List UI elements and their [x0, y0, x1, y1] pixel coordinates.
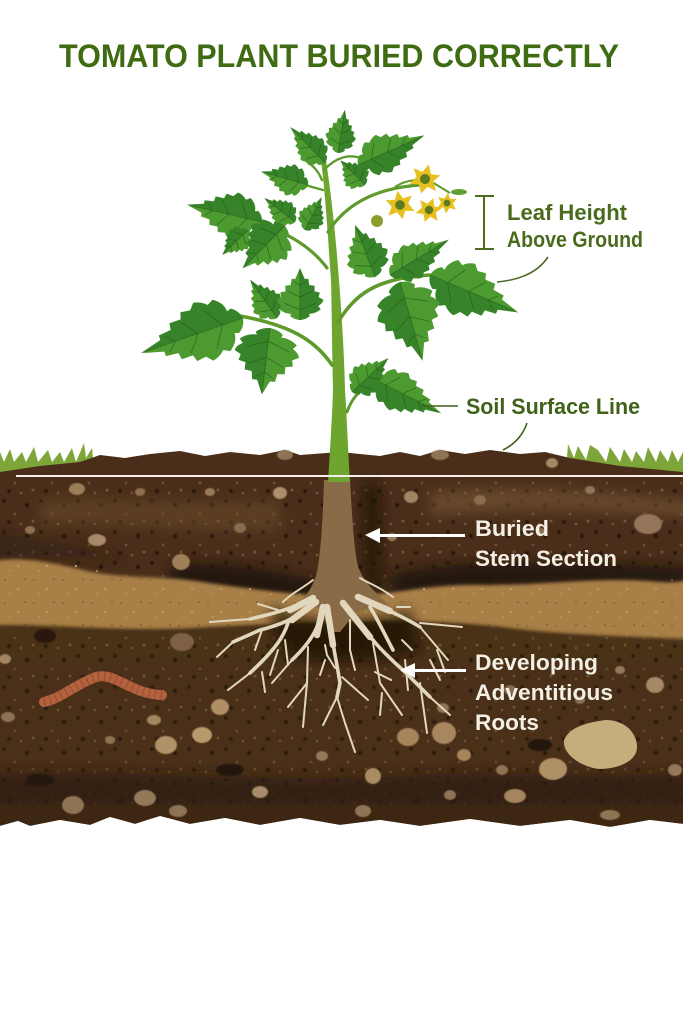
connector — [503, 423, 527, 450]
torn lower edge — [0, 806, 683, 827]
roots — [210, 578, 462, 752]
grass: right — [566, 444, 683, 472]
deep dark layer — [0, 621, 683, 700]
arrow — [400, 663, 466, 678]
label: developing adventitious roots: Developing — [475, 650, 598, 675]
label: developing adventitious roots: Roots — [475, 710, 539, 735]
worm — [44, 676, 162, 702]
tomato plant leaves — [131, 107, 529, 432]
dark soil mottling — [0, 482, 683, 600]
label: soil surface line: Soil Surface Line — [466, 394, 640, 419]
small sepal leaf — [451, 189, 467, 195]
white band cleaning blur below soil — [0, 816, 683, 850]
rock — [564, 720, 637, 769]
connector — [422, 405, 458, 407]
flowers — [371, 161, 467, 227]
label: buried stem section: Buried — [475, 516, 549, 541]
flower — [437, 192, 457, 214]
sand speckle — [0, 559, 683, 645]
buried stem and root crown — [296, 480, 388, 632]
label: leaf height above ground: Leaf Height — [507, 200, 628, 225]
stones — [0, 450, 682, 820]
title: TOMATO PLANT BURIED CORRECTLY — [59, 38, 619, 74]
flower — [384, 189, 416, 221]
connector — [497, 257, 548, 282]
flower — [408, 161, 442, 197]
label: buried stem section — [365, 516, 617, 571]
label: soil surface line — [422, 394, 640, 450]
grass: left — [0, 443, 94, 472]
soil surface line — [16, 475, 683, 477]
soil cross-section — [0, 443, 683, 850]
flower bud — [371, 215, 383, 227]
label: leaf height above ground: Above Ground — [507, 227, 643, 252]
stem and branches — [240, 156, 430, 482]
label: leaf height above ground — [475, 196, 643, 282]
label: developing adventitious roots: Adventitious — [475, 680, 613, 705]
arrow — [365, 528, 465, 543]
label: developing adventitious roots — [400, 650, 613, 735]
label: buried stem section: Stem Section — [475, 546, 617, 571]
sandy middle layer — [0, 559, 683, 645]
bracket — [475, 196, 494, 249]
topsoil layer — [0, 450, 683, 660]
dark soil blotches — [0, 605, 683, 810]
flower — [414, 194, 444, 226]
